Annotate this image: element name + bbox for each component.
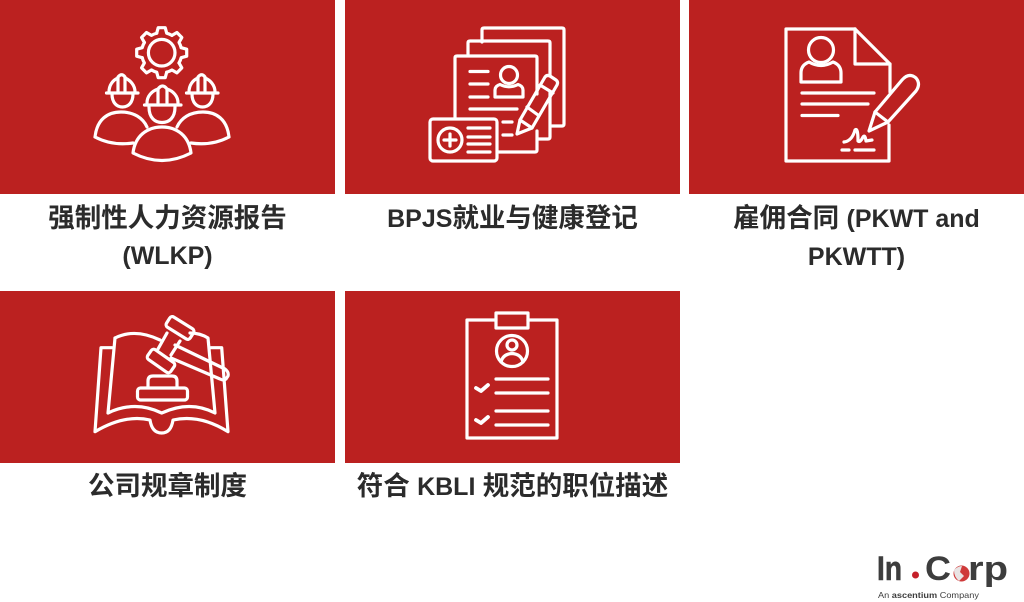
label: job description: 符合 KBLI 规范的职位描述 [357,471,668,501]
icon: clipboard with checklist [467,313,557,438]
logo wordmark: In [877,550,902,588]
icon: signed contract with pencil [786,29,918,161]
icon: workers with gear [95,28,229,161]
label: regulations: 公司规章制度 [88,471,247,501]
panel: job description [345,291,680,463]
panel: contract [689,0,1024,194]
panel: BPJS [345,0,680,194]
panel: regulations [0,291,335,463]
label: contract: PKWTT) [808,243,905,271]
label: BPJS: BPJS就业与健康登记 [387,203,638,233]
logo: InCorp: C [925,550,951,588]
icon: law book and gavel [95,315,228,433]
label: contract: 雇佣合同 (PKWT and [733,203,980,233]
panel: WLKP [0,0,335,194]
label: WLKP [48,203,287,270]
label: WLKP: 强制性人力资源报告 [48,203,287,233]
logo: InCorp: rp [968,550,1008,588]
label: WLKP: (WLKP) [122,242,213,270]
icon: documents, ID card and pencil [430,28,564,161]
logo: InCorp [877,550,1008,600]
label: contract [733,203,980,271]
logo tagline: An ascentium Company [878,590,980,600]
